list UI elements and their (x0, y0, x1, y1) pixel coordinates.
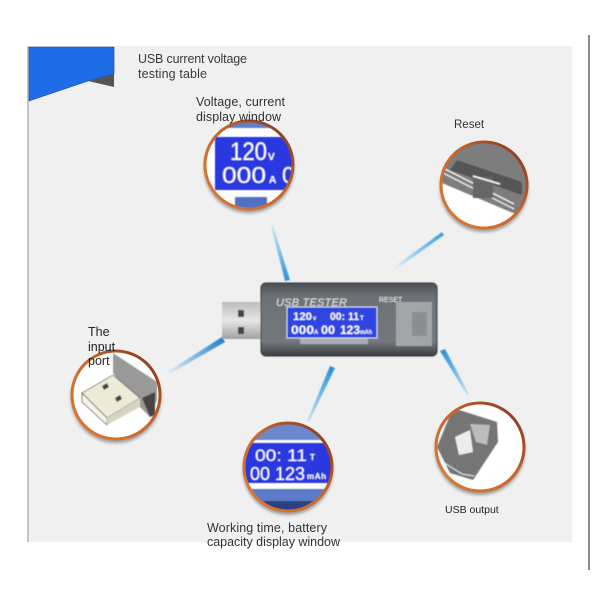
LCD screen: 000 (291, 323, 314, 337)
reset label: RESET (379, 297, 403, 304)
label: input port: port (88, 354, 110, 368)
LCD screen: 00: 11 (330, 311, 359, 323)
label: input port (88, 325, 116, 368)
LCD screen: mAh (360, 330, 372, 336)
banner: blue corner ribbon (29, 47, 114, 101)
callout: voltage, current window: 0 (282, 162, 295, 188)
label: input port: The (88, 325, 110, 339)
label: USB output: USB output (445, 504, 499, 516)
callout: input port (71, 350, 161, 443)
arrow: to input port (164, 337, 225, 376)
LCD screen: 120 (293, 311, 312, 323)
arrow: to voltage window (271, 225, 290, 281)
label: voltage, current: Voltage, current (196, 95, 286, 109)
callout: reset (438, 140, 530, 232)
title: testing table (138, 67, 207, 81)
label: working time, capacity: capacity display window (207, 535, 341, 549)
LCD screen: A (314, 330, 319, 336)
callout: working time, capacity window: 00: 11 (255, 446, 307, 465)
label: working time, capacity: Working time, battery (207, 521, 328, 535)
title (138, 52, 247, 81)
callout: working time, capacity window (243, 422, 333, 515)
LCD screen: 123 (340, 323, 360, 337)
USB plug (222, 302, 262, 339)
callout: working time, capacity window: T (310, 453, 315, 462)
LCD screen: T (360, 316, 364, 322)
label: working time, capacity (207, 521, 341, 549)
LCD screen: v (313, 316, 317, 322)
tester body (261, 283, 437, 356)
callout: voltage, current window: 000 (222, 162, 266, 188)
device label: USB TESTER (276, 297, 347, 309)
label: reset: Reset (454, 119, 485, 131)
arrow: to reset (391, 232, 444, 271)
LCD screen: 00 (321, 323, 335, 337)
label: voltage, current: display window (196, 110, 282, 124)
callout: voltage, current window (204, 118, 295, 213)
LCD screen (287, 307, 377, 338)
callout: working time, capacity window: mAh (307, 472, 326, 481)
device: USB tester (222, 283, 437, 356)
callout: working time, capacity window: 00 123 (250, 464, 305, 484)
title: USB current voltage (138, 52, 247, 66)
callout: voltage, current window: A (269, 175, 276, 186)
label: input port: input (88, 340, 116, 354)
label: voltage, current (196, 95, 286, 124)
panel: background (27, 46, 572, 542)
arrow: to time window (307, 366, 335, 422)
callout: voltage, current window: 120 (230, 138, 267, 166)
arrow: to USB output (440, 349, 469, 395)
callout: voltage, current window: V (268, 152, 275, 163)
callout: USB output (435, 402, 525, 495)
